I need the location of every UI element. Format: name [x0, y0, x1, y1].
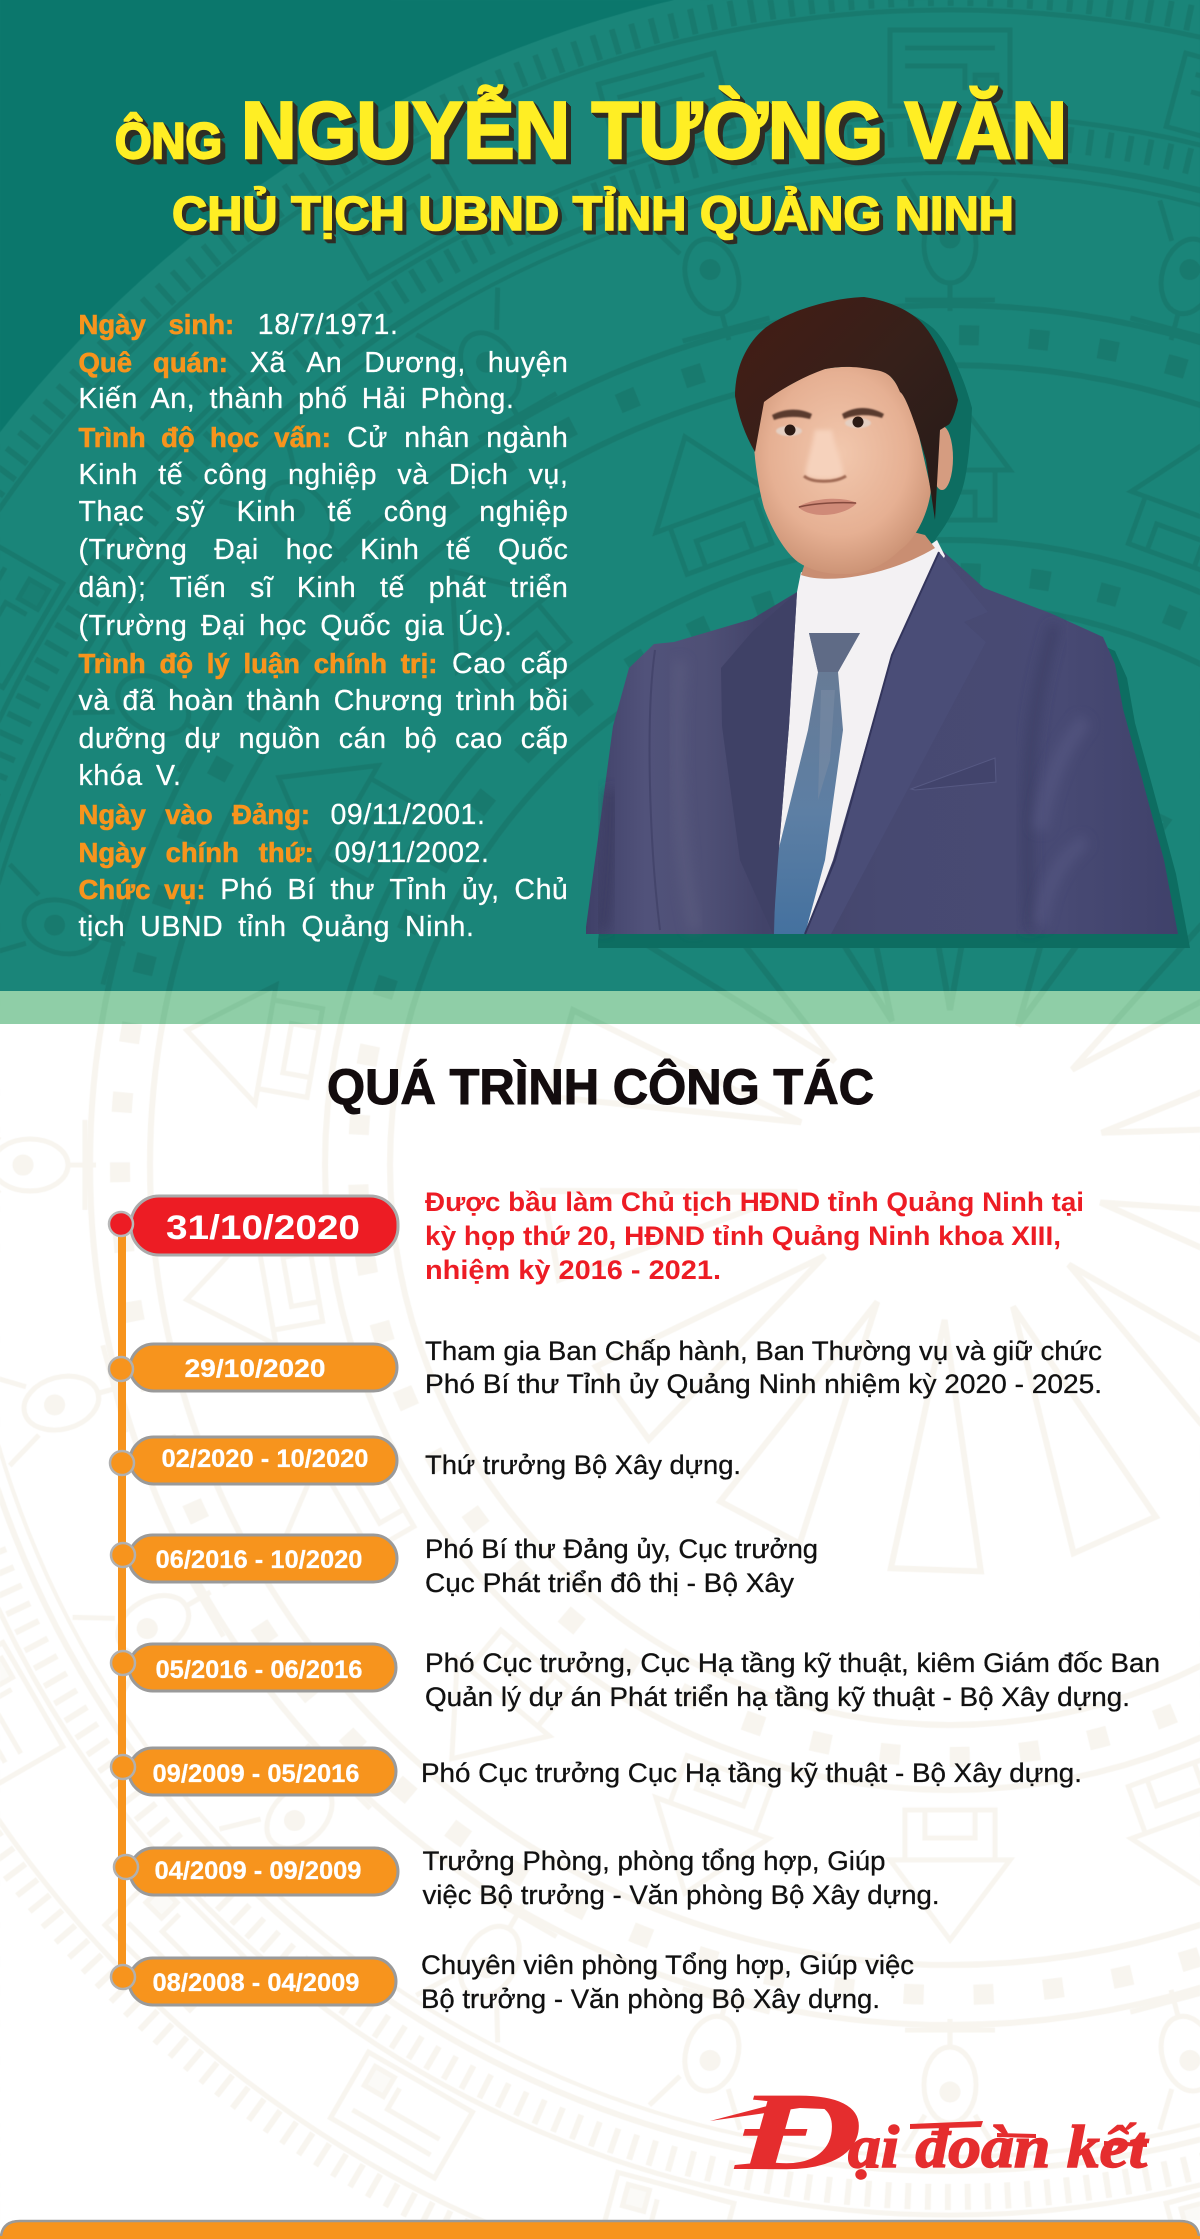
biography text block: tịch UBND tỉnh Quảng Ninh. — [78, 911, 474, 943]
hair — [735, 297, 958, 520]
entry: 09/2009 - 05/2016 — [111, 1748, 1082, 1795]
logo: Đại đoàn kết: ại đoàn kết — [848, 2114, 1150, 2180]
timeline spine — [118, 1224, 126, 1974]
biography text block: Kinh tế công nghiệp và Dịch vụ, — [78, 459, 568, 491]
title line: honorific and name: NGUYỄN TƯỜNG VĂN — [241, 85, 1067, 176]
biography text block: Trình độ học vấn: Cử nhân ngành — [78, 422, 569, 454]
biography text block: Kiến An, thành phố Hải Phòng. — [78, 383, 514, 415]
biography text block: khóa V. — [78, 760, 182, 792]
biography text block: dưỡng dự nguồn cán bộ cao cấp — [78, 723, 568, 755]
biography text block: (Trường Đại học Kinh tế Quốc — [78, 534, 568, 566]
entry: 09/2009 - 05/2016: 09/2009 - 05/2016 — [152, 1760, 360, 1788]
entry: 06/2016 - 10/2020: 06/2016 - 10/2020 — [156, 1546, 362, 1574]
entry: 29/10/2020: 29/10/2020 — [184, 1355, 326, 1383]
entry: 31/10/2020: Được bầu làm Chủ tịch HĐND tỉnh Quảng Ninh tại — [425, 1187, 1084, 1217]
entry: 02/2020 - 10/2020: 02/2020 - 10/2020 — [162, 1445, 368, 1473]
entry: 05/2016 - 06/2016: Quản lý dự án Phát triển hạ tầng kỹ thuật - Bộ Xây dựng. — [425, 1682, 1130, 1712]
entry: 31/10/2020: kỳ họp thứ 20, HĐND tỉnh Quảng Ninh khoa XIII, — [425, 1221, 1061, 1251]
entry: 06/2016 - 10/2020: Phó Bí thư Đảng ủy, Cục trưởng — [425, 1534, 818, 1564]
entry: 02/2020 - 10/2020: Thứ trưởng Bộ Xây dựng. — [425, 1450, 741, 1480]
title — [115, 84, 1068, 244]
entry: 09/2009 - 05/2016: Phó Cục trưởng Cục Hạ tầng kỹ thuật - Bộ Xây dựng. — [421, 1758, 1082, 1788]
section heading: work history: QUÁ TRÌNH CÔNG TÁC — [327, 1058, 874, 1115]
portrait drop shadow — [598, 305, 1190, 948]
suit jacket — [586, 546, 1178, 934]
title line: honorific and name: ÔNG — [115, 112, 222, 169]
entry: 04/2009 - 09/2009: việc Bộ trưởng - Văn phòng Bộ Xây dựng. — [422, 1880, 940, 1910]
facial features — [772, 408, 884, 515]
biography text block: (Trường Đại học Quốc gia Úc). — [78, 610, 512, 642]
necktie — [774, 633, 860, 934]
entry: 08/2008 - 04/2009 — [111, 1950, 914, 2014]
biography text block: và đã hoàn thành Chương trình bồi — [78, 685, 568, 717]
entry: 05/2016 - 06/2016: 05/2016 - 06/2016 — [156, 1656, 362, 1684]
head — [735, 297, 958, 579]
biography text block: dân); Tiến sĩ Kinh tế phát triển — [78, 572, 568, 604]
biography text block — [78, 309, 569, 943]
entry: 31/10/2020 — [109, 1187, 1084, 1285]
entry: 29/10/2020 — [109, 1336, 1102, 1399]
entry: 08/2008 - 04/2009: Chuyên viên phòng Tổng hợp, Giúp việc — [421, 1950, 914, 1980]
biography text block: Chức vụ: Phó Bí thư Tỉnh ủy, Chủ — [78, 874, 568, 906]
shirt — [775, 540, 945, 934]
entry: 02/2020 - 10/2020 — [110, 1437, 741, 1484]
entry: 05/2016 - 06/2016: Phó Cục trưởng, Cục Hạ tầng kỹ thuật, kiêm Giám đốc Ban — [425, 1648, 1160, 1678]
timeline — [108, 1187, 1160, 2014]
subtitle: position: CHỦ TỊCH UBND TỈNH QUẢNG NINH — [172, 186, 1014, 241]
entry: 31/10/2020: nhiệm kỳ 2016 - 2021. — [425, 1255, 721, 1285]
entry: 29/10/2020: Tham gia Ban Chấp hành, Ban Thường vụ và giữ chức — [425, 1336, 1102, 1366]
biography text block: Ngày sinh: 18/7/1971. — [78, 309, 398, 341]
biography text block: Thạc sỹ Kinh tế công nghiệp — [78, 496, 568, 528]
biography text block: Ngày chính thứ: 09/11/2002. — [78, 837, 490, 869]
entry: 08/2008 - 04/2009: Bộ trưởng - Văn phòng Bộ Xây dựng. — [421, 1984, 880, 2014]
entry: 04/2009 - 09/2009: 04/2009 - 09/2009 — [154, 1857, 362, 1885]
entry: 06/2016 - 10/2020 — [111, 1534, 818, 1598]
entry: 06/2016 - 10/2020: Cục Phát triển đô thị - Bộ Xây — [425, 1568, 795, 1598]
logo: Đại đoàn kết — [710, 2085, 1150, 2185]
entry: 29/10/2020: Phó Bí thư Tỉnh ủy Quảng Ninh nhiệm kỳ 2020 - 2025. — [425, 1369, 1102, 1399]
portrait illustration — [586, 297, 1190, 948]
entry: 08/2008 - 04/2009: 08/2008 - 04/2009 — [152, 1969, 360, 1997]
jacket lapels — [721, 552, 988, 934]
entry: 04/2009 - 09/2009: Trưởng Phòng, phòng tổng hợp, Giúp — [422, 1846, 886, 1876]
biography text block: Ngày vào Đảng: 09/11/2001. — [78, 799, 486, 831]
entry: 04/2009 - 09/2009 — [114, 1846, 940, 1910]
entry: 31/10/2020: 31/10/2020 — [166, 1209, 360, 1247]
biography text block: Trình độ lý luận chính trị: Cao cấp — [78, 648, 568, 680]
biography text block: Quê quán: Xã An Dương, huyện — [78, 347, 568, 379]
entry: 05/2016 - 06/2016 — [111, 1644, 1160, 1712]
